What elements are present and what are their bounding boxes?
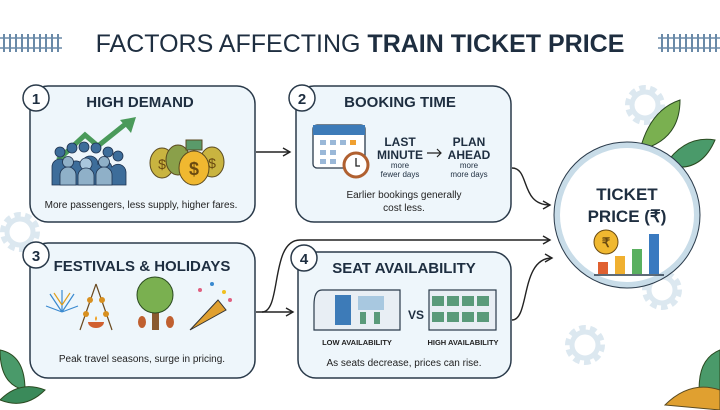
text: booking caption: Earlier bookings generally — [346, 190, 462, 201]
panel: festivals: 3 — [32, 248, 40, 265]
decorative gears — [4, 89, 678, 361]
icon: train high availability — [429, 290, 496, 330]
icon: calendar with clock — [313, 125, 368, 177]
panel: seat availability: HIGH AVAILABILITY — [427, 338, 499, 347]
ticket price circle: PRICE (₹) — [588, 207, 666, 226]
panel: high demand: 1 — [32, 91, 40, 108]
panel: booking time — [289, 85, 511, 222]
text: last minute to plan ahead: AHEAD — [448, 148, 491, 162]
arrow: 2 to ticket price — [512, 168, 550, 205]
text: last minute to plan ahead: more — [391, 161, 410, 170]
panel: high demand: HIGH DEMAND — [86, 94, 194, 111]
panel: booking time: 2 — [298, 91, 306, 108]
text: festival caption: Peak travel seasons, surge in pricing. — [59, 354, 225, 365]
icon: crowd with arrow — [52, 117, 136, 185]
ticket price circle — [554, 142, 700, 288]
panel: festivals — [23, 242, 255, 378]
text: last minute to plan ahead: more days — [450, 170, 488, 179]
text: last minute to plan ahead: PLAN — [453, 135, 485, 149]
arrow: 3 to 4 and to ticket price — [256, 240, 550, 312]
arrow: 1 to 2 — [256, 151, 290, 153]
text: last minute to plan ahead: LAST — [384, 135, 416, 149]
text: availability labels: LOW AVAILABILITY — [322, 338, 392, 347]
icon: money bags: $ — [208, 155, 216, 171]
panel: seat availability: SEAT AVAILABILITY — [332, 260, 476, 277]
icon: train low availability — [314, 290, 400, 330]
text: seat caption: As seats decrease, prices can rise. — [326, 358, 482, 369]
chart: rising bars with rupee coin — [594, 230, 664, 275]
text: last minute to plan ahead: more — [460, 161, 479, 170]
chart: rising bars with rupee coin: ₹ — [602, 235, 611, 250]
panel: festivals: FESTIVALS & HOLIDAYS — [54, 258, 230, 275]
panel: booking time: cost less. — [383, 203, 425, 214]
panel: high demand — [23, 85, 255, 222]
text: last minute to plan ahead: fewer days — [381, 170, 419, 179]
text: demand caption: More passengers, less supply, higher fares. — [45, 200, 237, 211]
panel: seat availability — [291, 245, 511, 378]
decorative leaves — [0, 100, 720, 410]
text: last minute to plan ahead: MINUTE — [377, 148, 423, 162]
title: FACTORS AFFECTING TRAIN TICKET PRICE — [96, 30, 624, 58]
ticket price circle: TICKET — [596, 185, 658, 204]
icon: festival illustrations — [46, 277, 232, 330]
text: last minute to plan ahead — [377, 135, 491, 179]
icon: money bags: $ — [189, 159, 199, 179]
icon: money bags — [150, 140, 224, 185]
arrow: 4 to ticket price — [512, 258, 552, 320]
text: vs: VS — [408, 308, 424, 322]
panel: booking time: BOOKING TIME — [344, 94, 456, 111]
icon: money bags: $ — [158, 156, 166, 172]
panel: seat availability: 4 — [300, 251, 309, 268]
